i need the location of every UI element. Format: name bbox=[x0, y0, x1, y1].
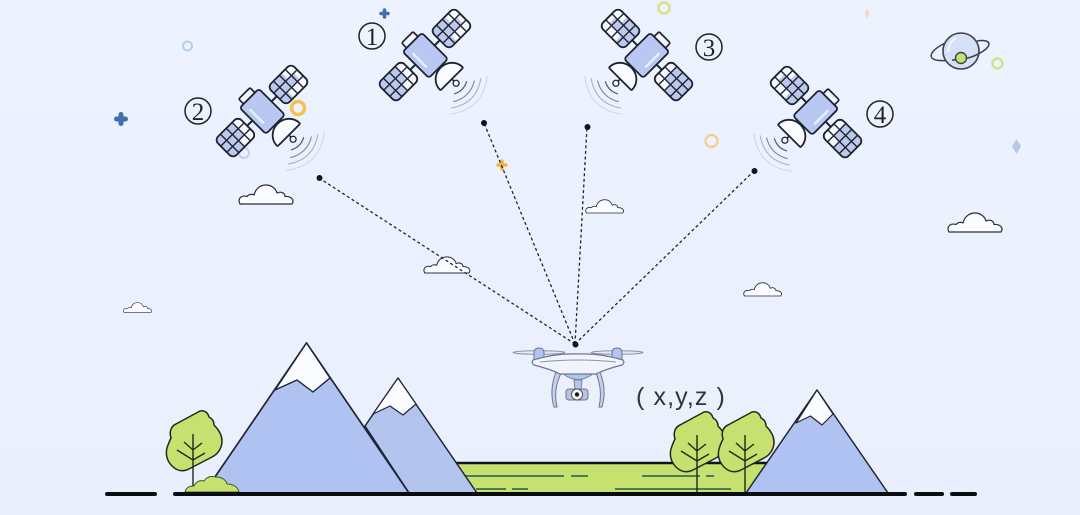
label 2: 2 bbox=[192, 99, 204, 126]
label 4: 4 bbox=[874, 102, 887, 129]
tree middle bbox=[670, 412, 726, 493]
tree right bbox=[718, 412, 774, 493]
label 1: 1 bbox=[366, 24, 378, 51]
decorative rings and sparkles bbox=[116, 2, 1021, 169]
field bbox=[455, 463, 770, 492]
label 2 bbox=[185, 98, 211, 126]
orange ring over satellite 2 bbox=[292, 102, 304, 114]
icon: planet bbox=[931, 33, 989, 69]
ground line bbox=[107, 492, 975, 496]
mountain: right peak bbox=[746, 390, 888, 493]
mountain: main peak bbox=[204, 343, 409, 493]
drone bbox=[513, 348, 643, 407]
coordinates label: ( x,y,z ) bbox=[636, 383, 726, 411]
signal end points bbox=[316, 120, 758, 348]
satellite 4 bbox=[729, 56, 872, 199]
bush bbox=[185, 476, 239, 492]
satellite 1 bbox=[369, 0, 512, 142]
propellers bbox=[513, 351, 565, 354]
motors bbox=[534, 348, 622, 361]
legs bbox=[552, 372, 604, 407]
signal lines from satellites to drone bbox=[319, 123, 754, 344]
mountain: second peak bbox=[365, 378, 477, 493]
body bbox=[532, 354, 624, 374]
label 1 bbox=[359, 23, 385, 51]
gimbal bbox=[562, 371, 594, 390]
satellite 3 bbox=[560, 0, 703, 142]
tree left bbox=[166, 411, 222, 492]
label 4 bbox=[867, 101, 893, 129]
clouds bbox=[124, 185, 1002, 312]
camera bbox=[566, 389, 588, 400]
label 3 bbox=[696, 34, 722, 62]
label 3: 3 bbox=[703, 35, 715, 62]
satellite 2 bbox=[206, 55, 349, 198]
